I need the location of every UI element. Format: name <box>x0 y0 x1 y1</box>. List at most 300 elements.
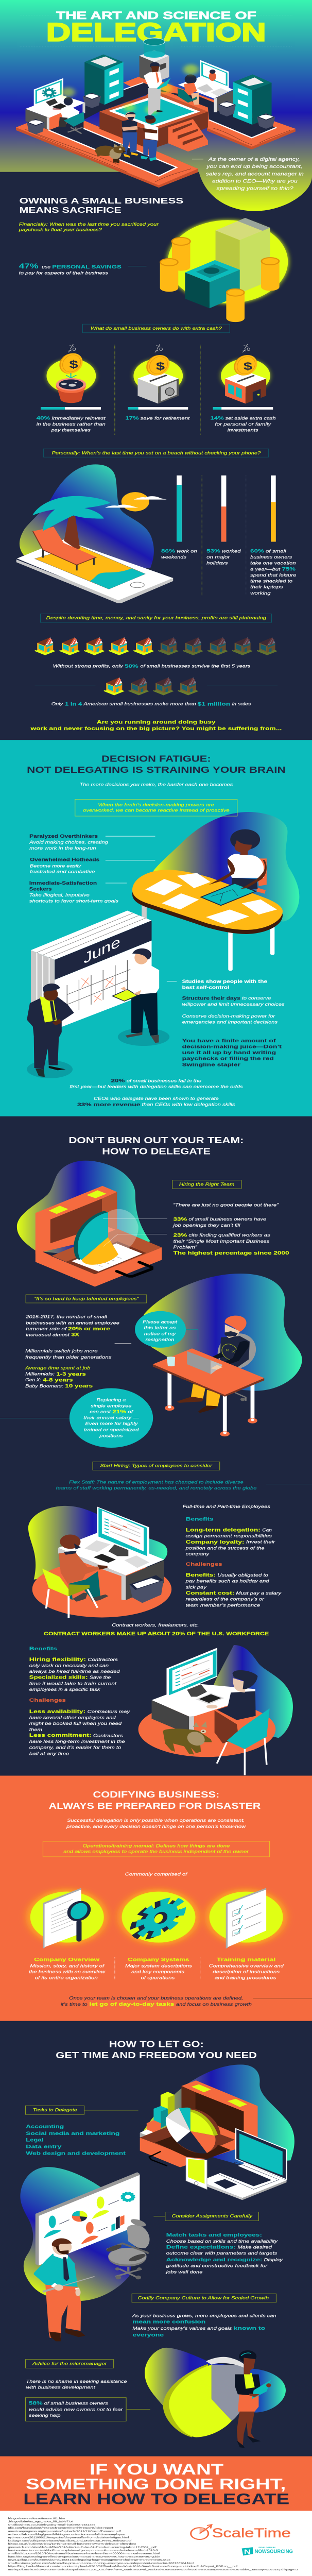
column: training material: Comprehensive overview and <box>209 1964 284 1969</box>
box: plateauing profits: Despite devoting time, money, and sanity for your business, profits are still plateauing <box>46 616 267 621</box>
progress bar: 14% <box>213 407 273 410</box>
filing cabinet left <box>84 55 124 105</box>
question: financially <box>19 223 159 232</box>
glow spots <box>61 64 199 114</box>
text: no shame: with business development <box>26 2385 96 2390</box>
illustration: savings building, cube and coins <box>160 218 289 322</box>
full-time challenges: Constant cost: <box>186 1591 234 1596</box>
subheading: contract workers: CONTRACT WORKERS MAKE UP ABOUT 20% OF THE U.S. WORKFORCE <box>44 1632 269 1636</box>
quote: no good people: “There are just no good people out there” <box>173 1203 279 1208</box>
stat: turnover: businesses with an annual employee <box>26 1321 119 1326</box>
stat: 60% <box>250 549 297 596</box>
contract challenges: Challenges <box>29 1698 66 1703</box>
full-time benefits: Can <box>262 1528 272 1533</box>
person left <box>53 97 84 133</box>
intro text: Successful delegation is only possible when operations are consistent, <box>67 1819 245 1823</box>
text: assignment tips: Match tasks and employees: <box>166 2232 262 2238</box>
list: tasks: Social media and marketing <box>26 2131 119 2136</box>
panel: employee types <box>28 1506 293 1775</box>
contract challenges: have several other employers and <box>29 1716 116 1720</box>
heading: codifying business <box>49 1790 261 1811</box>
stat: 60%: 75% <box>282 567 296 572</box>
intro text <box>66 1819 246 1829</box>
contract benefits: always be hired full-time as needed <box>29 1670 120 1674</box>
title: DELEGATION <box>46 18 266 47</box>
fatigue type: immediate-satisfaction seekers: shortcuts to favor short-term goals <box>29 899 118 904</box>
sources: smallbusiness.co.uk/delegating-small-business-2541485 <box>8 2523 96 2526</box>
raised platform with pool <box>99 92 208 151</box>
stat: 40%: pay themselves <box>51 428 91 433</box>
panel: decision fatigue illustrations <box>27 829 285 1078</box>
stat: 47% personal savings: to pay for aspects of their business <box>19 271 108 276</box>
sources: businessinsider.com/reid-hoffman-explains-why-corporate-culture-needs-to-be-codified-2016-3 <box>8 2549 158 2552</box>
full-time benefits: Long-term delegation: <box>186 1528 261 1533</box>
box: consider assignments: Consider Assignments Carefully <box>172 2214 253 2219</box>
icon: document with magnifier <box>28 1888 106 1948</box>
contract benefits: Save the <box>90 1675 111 1680</box>
stat: 23% qualified workers: cite finding qualified workers as <box>188 1233 270 1238</box>
callout text <box>192 157 304 191</box>
illustration: office chair <box>105 2217 150 2279</box>
sources: activecollab.com/blog/growth/hiring-a-contractor-vs-a-full-time-employee <box>8 2533 125 2536</box>
heading: decision fatigue: NOT DELEGATING IS STRAINING YOUR BRAIN <box>27 765 286 775</box>
box: tasks to delegate: Tasks to Delegate <box>33 2108 77 2112</box>
full-time challenges: pay benefits such as holiday and <box>185 1579 269 1584</box>
stat: 60%: business owners <box>250 555 292 560</box>
list: tasks: Data entry <box>26 2144 62 2149</box>
box: reactive brain <box>75 799 237 816</box>
heading: codifying business: CODIFYING BUSINESS: <box>93 1790 219 1800</box>
stat: 50% survive: of small businesses survive the first 5 years <box>140 664 250 669</box>
stat: 60%: time shackled to <box>250 579 293 584</box>
filing cabinet right <box>233 74 272 125</box>
callout text: you can end up being accountant, <box>206 164 302 169</box>
circle: cost of replacing: their annual salary — <box>83 1416 140 1420</box>
list: tasks: Web design and development <box>26 2151 126 2156</box>
stat: 33% openings: of small business owners have <box>188 1217 267 1222</box>
list: tasks: Legal <box>26 2138 43 2143</box>
text: finite juice <box>182 1038 282 1067</box>
fatigue type: immediate-satisfaction seekers <box>29 881 127 904</box>
stat: 1 in 4: $1 million <box>198 702 231 707</box>
text: structure their days <box>182 996 285 1007</box>
two men talking <box>122 112 158 161</box>
sources: nytimes.com/2011/08/21/magazine/do-you-suffer-from-decision-fatigue.html <box>8 2536 129 2539</box>
contract benefits: Contractors <box>88 1658 118 1662</box>
text: studies show <box>167 979 267 990</box>
sources: greenwich.com/sites/default/files/2016-Market-Pulse-67-Trends-in-sourcing-talent.17-7002_.pdf <box>8 2546 157 2549</box>
stat: 60%: a year—but <box>250 567 281 572</box>
stat: 33% more revenue: CEOs who delegate have been shown to generate <box>94 1097 219 1101</box>
stat: 50% survive: Without strong profits, only <box>53 664 124 669</box>
text: culture: mean more confusion <box>132 2319 205 2325</box>
stat: turnover: turnover rate of <box>26 1327 67 1331</box>
text: assignment tips: Make desired <box>237 2245 272 2250</box>
box: 58% stat <box>25 2398 150 2421</box>
bar: 60% <box>271 476 276 541</box>
stat: turnover: increased almost <box>26 1333 70 1337</box>
stat: 14%: 14% <box>211 416 224 421</box>
text: flex staff: Flex Staff: The nature of employment has changed to include diverse <box>69 1480 244 1485</box>
water cooler <box>140 38 169 82</box>
stat: 14% <box>211 416 276 433</box>
list: tasks <box>26 2124 126 2156</box>
list: tasks: Accounting <box>26 2124 64 2129</box>
subheading: commonly comprised of: Commonly comprised of <box>125 1872 188 1877</box>
panel: personal sacrifice <box>16 449 297 622</box>
stat: 33% more revenue <box>77 1097 235 1107</box>
callout text: addition to CEO—Why are you <box>212 179 298 184</box>
callout blob <box>197 157 312 211</box>
logo: NowSourcing: N <box>244 2549 251 2555</box>
stat: 53% <box>206 549 241 566</box>
box: start hiring <box>93 1462 220 1470</box>
circle: cost of replacing: Replacing a <box>96 1398 126 1402</box>
stat: 23% qualified workers: The highest percentage since 2000 <box>174 1251 289 1256</box>
stat: 14%: investments <box>228 428 258 433</box>
sources: https://blog.bankofthewest.com/wp-content/uploads/2016/07/Bank-of-the-West-2016-Small-Business-Survey-and-Index-Full-Report_PDF.co__.pdf <box>8 2565 237 2568</box>
box: personally <box>43 449 269 457</box>
stat: 53%: worked <box>222 549 241 554</box>
sources: americanprogress.org/wp-content/uploads/2012/11/CostofTurnover.pdf <box>8 2530 121 2533</box>
question: financially: Financially: When was the last time you sacrificed your <box>19 223 159 227</box>
full-time benefits: company <box>186 1552 210 1557</box>
intro text: proactive, and every decision doesn’t hinge on one person’s know-how <box>66 1824 246 1829</box>
stat: 47% personal savings: PERSONAL SAVINGS <box>52 264 122 270</box>
column: training material: and training procedures <box>215 1976 276 1980</box>
heading: codifying business: ALWAYS BE PREPARED FOR DISASTER <box>49 1801 261 1811</box>
column: company overview: of its entire organization <box>35 1976 98 1980</box>
box: hiring the right team <box>172 1180 241 1189</box>
stat: 23% qualified workers: Problem” <box>174 1245 197 1250</box>
illustration: whiteboard presenter <box>20 2167 140 2341</box>
box: reactive brain: overworked, we can become reactive instead of proactive <box>83 808 230 813</box>
circle: resignation letter: this letter as <box>144 1326 176 1330</box>
subheading: The more decisions you make, the harder each one becomes <box>80 783 233 787</box>
text: assignment tips <box>165 2232 283 2275</box>
illustration: briefcase with devices <box>140 2064 294 2200</box>
question: busy work: work and never focusing on the big picture? You might be suffering from... <box>30 726 282 732</box>
callout text: sales rep, and account manager in <box>206 172 304 177</box>
bar: 86% <box>177 476 182 541</box>
stat: 33% openings: 33% <box>174 1217 187 1222</box>
fatigue type: paralyzed overthinkers: Avoid making choices, creating <box>29 840 108 845</box>
circle: resignation letter: notice of my <box>144 1332 176 1336</box>
illustration: man with tablet <box>112 948 169 1046</box>
question: financially: paycheck to float your business? <box>19 228 102 232</box>
text: let go of tasks: Once your team is chosen and your business operations are defined, <box>69 1996 243 2001</box>
stat: 23% qualified workers <box>174 1233 289 1256</box>
panel: keeping employees <box>0 1274 312 1509</box>
sources: news.gallup.com/businessjournal/182414/delegating-huge-management-challenge-entrepreneurs.aspx <box>8 2558 171 2562</box>
column: company systems: and key components <box>131 1970 184 1975</box>
full-time challenges: Challenges <box>186 1562 222 1567</box>
stat: 33% openings <box>172 1217 267 1228</box>
stat: 50% survive <box>53 664 250 669</box>
contract challenges: company, and it’s easier for them to <box>29 1745 122 1750</box>
heading: don't burn out: DON’T BURN OUT YOUR TEAM: <box>68 1136 244 1145</box>
sources <box>8 2517 298 2571</box>
sources: smallbizlabs.com/2016/10/most-small-businesses-have-less-than-400000-in-annual-revenue.html <box>8 2552 160 2555</box>
stat: 17%: 17% <box>125 416 139 421</box>
stat: 1 in 4: American small businesses make more than <box>83 702 196 706</box>
contract benefits: Specialized skills: <box>29 1675 88 1680</box>
sources: kabbage.com/pdfs/pressreleases/Sacrifices_and_Motivation_Press_Release.pdf <box>8 2539 131 2542</box>
text: let go of tasks: and focus on business growth <box>176 2003 252 2007</box>
stat: 33% more revenue: than CEOs with low delegation skills <box>142 1103 235 1107</box>
illustration: contractor with dog <box>138 1645 293 1775</box>
heading: decision fatigue <box>27 754 286 775</box>
panel: profits and fatigue intro <box>27 637 299 922</box>
circle: cost of replacing: positions <box>99 1434 123 1438</box>
contract benefits: Hiring flexibility: <box>29 1657 86 1662</box>
column: company overview <box>29 1957 106 1980</box>
column: company systems <box>125 1957 192 1980</box>
illustration: full-time employee <box>28 1506 171 1618</box>
fatigue type: overwhelmed hotheads: Overwhelmed Hotheads <box>30 858 99 862</box>
manager with tablet <box>144 62 171 116</box>
full-time benefits: position and the success of the <box>185 1546 265 1551</box>
text: no shame <box>26 2379 127 2390</box>
stat: 86% <box>161 549 197 560</box>
panel: closing and footer <box>8 2379 298 2571</box>
stat: turnover: 20% or more <box>68 1327 110 1332</box>
list: average time at job <box>25 1366 93 1389</box>
text: assignment tips: Choose based on skills and time availability <box>166 2239 278 2244</box>
icon: gear <box>120 1890 197 1944</box>
person right <box>178 74 199 105</box>
panel: delegation revenue <box>17 1078 289 1286</box>
full-time challenges: Must pay a salary <box>236 1591 282 1596</box>
panel: assignments and culture <box>20 2167 286 2448</box>
stat: 60%: working <box>250 591 271 596</box>
full-time benefits: Benefits <box>186 1517 214 1522</box>
box: codify culture: Codify Company Culture to Allow for Scaled Growth <box>137 2296 269 2300</box>
contract challenges: Contractors <box>93 1734 123 1738</box>
contract benefits: employees in a specific task <box>29 1688 101 1692</box>
panel: financial sacrifice <box>19 218 289 435</box>
text: studies show: Studies show people with the <box>182 979 267 985</box>
circle: cost of replacing: single employee <box>91 1404 132 1409</box>
heading: owning a small business: MEANS SACRIFICE <box>19 206 122 215</box>
box: keep talented employees: “It’s so hard to keep talented employees” <box>34 1297 139 1301</box>
text: let go of tasks <box>61 1996 312 2007</box>
box: plateauing profits <box>40 614 272 622</box>
stat: 50% survive: 50% <box>125 664 138 669</box>
box: extra cash <box>82 324 230 333</box>
illustration blob: fatigue <box>153 812 299 922</box>
heading: how to let go: GET TIME AND FREEDOM YOU NEED <box>56 2050 257 2060</box>
stat: 40%: in the business rather than <box>37 422 106 427</box>
box: codify culture <box>132 2294 276 2302</box>
callout text: spreading yourself so thin? <box>216 186 293 191</box>
dog <box>95 143 126 163</box>
illustration: june calendar: June <box>83 933 120 968</box>
text: let go of tasks: it’s time to <box>61 2003 88 2007</box>
box: 58% stat: seeking help <box>29 2413 61 2418</box>
stat: 47% personal savings <box>19 262 146 276</box>
stat: 40% <box>37 416 106 433</box>
subheading: contract workers: Contract workers, freelancers, etc. <box>112 1623 199 1628</box>
sources: franchise.org/creating-an-effective-operations-manual-a-%E2%80%9Chow-to%E2%80%9D-guide <box>8 2555 161 2558</box>
full-time challenges: Usually obligated to <box>217 1573 268 1578</box>
sources: smallbusiness.yahoo.com/advisor/the-pros-and-cons-of-hiring--employee-vs--independent-contractor-203736904.html <box>8 2562 194 2565</box>
stat: 14%: set aside extra cash <box>225 416 276 421</box>
stat: 47% personal savings: use <box>42 265 51 269</box>
column dividers <box>115 345 200 435</box>
heading: owning a small business <box>19 196 183 215</box>
stat: 60%: spend that leisure <box>250 573 297 578</box>
text: culture: known to <box>234 2326 265 2331</box>
logo: ScaleTime: ScaleTime <box>212 2526 291 2540</box>
full-time benefits <box>185 1517 275 1557</box>
text: conserve power: emergencies and important decisions <box>182 1020 278 1025</box>
illustration: stressed woman at table <box>132 829 283 971</box>
box: advice for the micromanager: Advice for the micromanager <box>32 2362 107 2366</box>
heading: owning a small business: OWNING A SMALL BUSINESS <box>19 196 183 206</box>
stat: 40%: immediately reinvest <box>51 416 106 421</box>
column: company systems: of operations <box>141 1976 175 1980</box>
stat: 20% fail: of small businesses fail in the <box>127 1079 202 1083</box>
stat: 47% personal savings: 47% <box>19 262 39 270</box>
list: average time at job: 1-3 years <box>56 1372 86 1377</box>
stat: 86%: weekends <box>161 555 186 560</box>
box: operations manual <box>43 1841 270 1857</box>
text: assignment tips: outcome clear with parameters and targets <box>166 2251 277 2256</box>
contract benefits: only work on necessity and can <box>29 1664 109 1668</box>
text: no shame: There is no shame in seeking assistance <box>26 2379 127 2384</box>
full-time challenges: sick pay <box>186 1585 207 1590</box>
list: average time at job: Baby Boomers: <box>25 1384 63 1388</box>
full-time challenges: regardless of the company’s or <box>186 1597 265 1602</box>
bar: 53% <box>221 476 226 541</box>
text: finite juice: decision-making juice—Don’t <box>182 1044 282 1049</box>
illustration: june calendar <box>31 910 151 1027</box>
text: conserve power <box>182 1014 278 1025</box>
progress bar: 40% <box>41 407 101 410</box>
box: 58% stat: of small business owners <box>44 2401 109 2406</box>
fatigue type: overwhelmed hotheads <box>30 858 155 874</box>
contract challenges: Contractors may <box>88 1709 130 1714</box>
text: culture: As your business grows, more employees and clients can <box>132 2314 276 2318</box>
fatigue type: overwhelmed hotheads: frustrated and combative <box>30 870 95 874</box>
desk right <box>178 60 233 112</box>
column: company systems: Company Systems <box>128 1957 189 1962</box>
column: company overview: the business with an overview <box>29 1970 106 1975</box>
list: average time at job: Gen X: <box>25 1378 41 1383</box>
box: consider assignments <box>153 2212 258 2221</box>
stat: 1 in 4 <box>51 702 251 707</box>
stat: 1 in 4: in sales <box>232 702 251 706</box>
stat: 20% fail: 20% <box>111 1078 125 1083</box>
fatigue type: immediate-satisfaction seekers: Take illogical, impulsive <box>29 893 90 897</box>
fatigue type: immediate-satisfaction seekers: Immediate-Satisfaction <box>29 881 97 886</box>
stat: 86%: work on <box>177 549 197 554</box>
sources: nfib.com/foundations/research-center/monthly-reports/jobs-report <box>8 2527 113 2530</box>
contract challenges <box>29 1698 130 1756</box>
text: flex staff: teams of staff working permanently, as-needed, and remotely across the globe <box>56 1486 257 1490</box>
heading: don't burn out <box>68 1136 244 1157</box>
icon row: 5 of 10 stores <box>35 637 278 655</box>
stat: turnover: 2015-2017, the number of small <box>25 1315 108 1319</box>
stat: 53%: on major <box>206 555 230 560</box>
progress bar: 17% <box>128 407 188 410</box>
subheading: contract workers <box>44 1623 269 1636</box>
sources: .bls.gov/bdm/us_age_naics_00_table7.txt <box>8 2520 73 2523</box>
column: company overview: Mission, story, and history of <box>30 1964 105 1969</box>
text: assignment tips: Display <box>264 2258 283 2262</box>
box: 58% stat: 58% <box>29 2401 43 2406</box>
fatigue type: immediate-satisfaction seekers: Seekers <box>29 887 51 892</box>
text: culture <box>132 2314 276 2337</box>
text: studies show: best self-control <box>182 985 229 990</box>
column: training material <box>209 1957 284 1980</box>
text: let go of tasks: let go of day-to-day tasks <box>90 2002 175 2007</box>
contract challenges: Less commitment: <box>29 1733 91 1738</box>
full-time benefits: Company loyalty: <box>186 1540 245 1545</box>
circle: resignation letter: resignation <box>146 1338 175 1342</box>
box: operations manual: Operations/training manual: Defines how things are done <box>82 1844 230 1849</box>
circle: cost of replacing: of <box>128 1410 134 1414</box>
question: busy work <box>30 719 282 732</box>
illustration: beach on a phone <box>16 464 173 603</box>
text: assignment tips: gratitude and constructive feedback for <box>166 2264 268 2268</box>
stat: 33% openings: job openings they can’t fill <box>172 1223 240 1228</box>
box: keep talented employees <box>26 1295 147 1303</box>
icon: checklist <box>207 1888 285 1948</box>
box: tasks to delegate <box>25 2106 138 2114</box>
stat: 23% qualified workers: 23% <box>174 1233 187 1238</box>
contract challenges: bail at any time <box>29 1752 70 1756</box>
fatigue type: paralyzed overthinkers: more work in the long-run <box>29 846 96 851</box>
contract benefits: time it would take to train current <box>29 1682 117 1686</box>
contract challenges: Less availability: <box>29 1709 85 1714</box>
icon: coin into safe: $ <box>156 360 165 372</box>
title: THE ART AND SCIENCE OF <box>56 9 256 22</box>
text: assignment tips: jobs well done <box>165 2270 203 2275</box>
text: millennials: frequently than older generations <box>25 1355 111 1360</box>
stat: 20% fail: first year—but leaders with delegation skills can overcome the odds <box>70 1085 243 1090</box>
text: flex staff <box>56 1480 312 1490</box>
icon: coin into shop <box>221 344 270 403</box>
logo: NowSourcing: DEVELOPED BY <box>258 2547 275 2549</box>
full-time challenges: Benefits: <box>186 1573 216 1578</box>
box: advice for the micromanager <box>25 2360 114 2368</box>
circle: cost of replacing: Even more for highly <box>85 1422 138 1427</box>
panel: manual contents and let go <box>25 1957 312 2200</box>
panel: hero <box>0 0 312 215</box>
text: millennials: Millennials switch jobs more <box>25 1349 98 1353</box>
text: assignment tips: Acknowledge and recognize: <box>166 2257 262 2262</box>
stat: 53%: holidays <box>206 561 228 566</box>
stat: 60%: 60% <box>250 549 264 554</box>
stat: 40%: 40% <box>37 416 50 421</box>
column: training material: Training material <box>217 1957 275 1962</box>
circle: resignation letter <box>135 1311 198 1348</box>
desk left <box>25 78 85 130</box>
title <box>20 9 292 47</box>
text: conserve power: Conserve decision-making power for <box>182 1014 275 1019</box>
full-time challenges <box>185 1562 282 1608</box>
list: average time at job: Millennials: <box>25 1372 55 1377</box>
illustration: resigning employee <box>142 1274 302 1436</box>
text: finite juice: paychecks or filling the red <box>182 1056 274 1061</box>
fatigue type: paralyzed overthinkers: Paralyzed Overthinkers <box>29 834 98 839</box>
illustration: woman and pie chart <box>145 2348 286 2448</box>
full-time benefits: Invest their <box>246 1540 275 1545</box>
column: company systems: Major system descriptions <box>125 1964 192 1969</box>
stat: 33% more revenue: 33% more revenue <box>77 1103 140 1107</box>
